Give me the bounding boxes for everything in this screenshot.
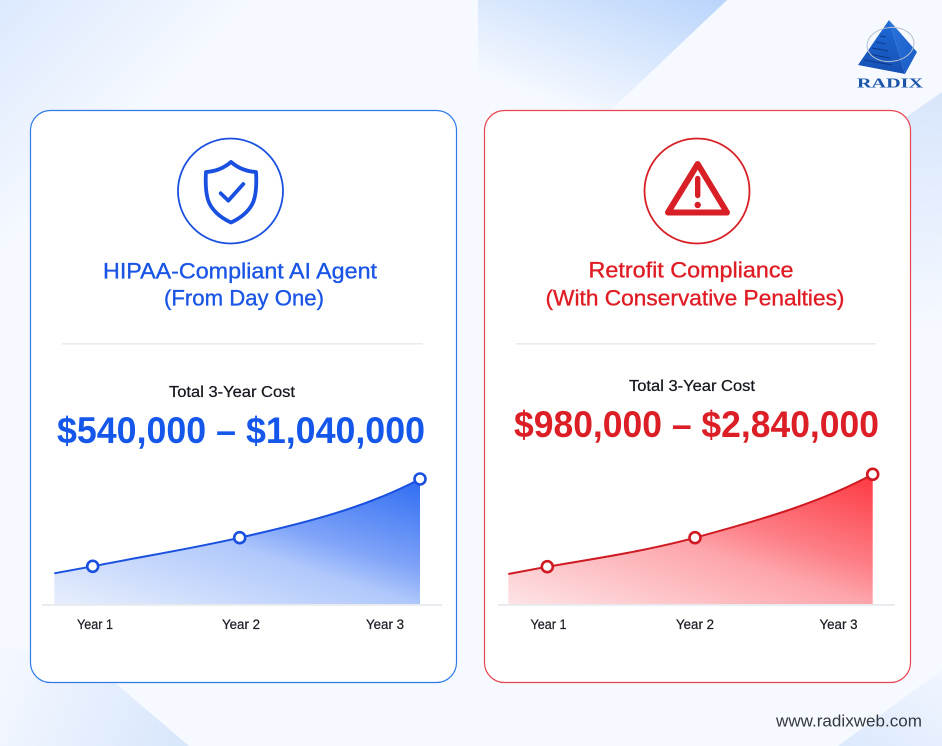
axis labels: Year 3: [820, 617, 858, 632]
heading: (With Conservative Penalties): [546, 286, 844, 310]
axis labels: [530, 617, 858, 632]
panel: retrofit compliance: [484, 110, 910, 682]
panel: HIPAA-compliant AI agent: [30, 110, 456, 682]
logo: Radix: [857, 20, 923, 92]
heading: HIPAA-Compliant AI Agent: [103, 258, 378, 284]
axis labels: Year 1: [530, 617, 566, 632]
heading: [103, 258, 378, 310]
icon: pyramid: [858, 20, 917, 74]
heading: Retrofit Compliance: [588, 258, 794, 282]
heading: [546, 258, 844, 310]
cost label: Total 3-Year Cost: [169, 384, 296, 401]
axis labels: Year 1: [77, 617, 113, 632]
logo wordmark: RADIX: [857, 76, 923, 92]
cost value: $980,000 – $2,840,000: [514, 404, 879, 445]
website url: www.radixweb.com: [775, 712, 922, 730]
icon: shield with check: [178, 138, 283, 244]
axis labels: [77, 617, 404, 632]
axis labels: Year 3: [366, 617, 404, 632]
axis labels: Year 2: [222, 617, 260, 632]
heading: (From Day One): [164, 286, 324, 310]
area chart: [42, 474, 442, 606]
icon: warning triangle: [644, 138, 750, 244]
cost label: Total 3-Year Cost: [629, 378, 756, 395]
area chart: [498, 469, 895, 606]
axis labels: Year 2: [676, 617, 714, 632]
cost value: $540,000 – $1,040,000: [57, 410, 425, 451]
